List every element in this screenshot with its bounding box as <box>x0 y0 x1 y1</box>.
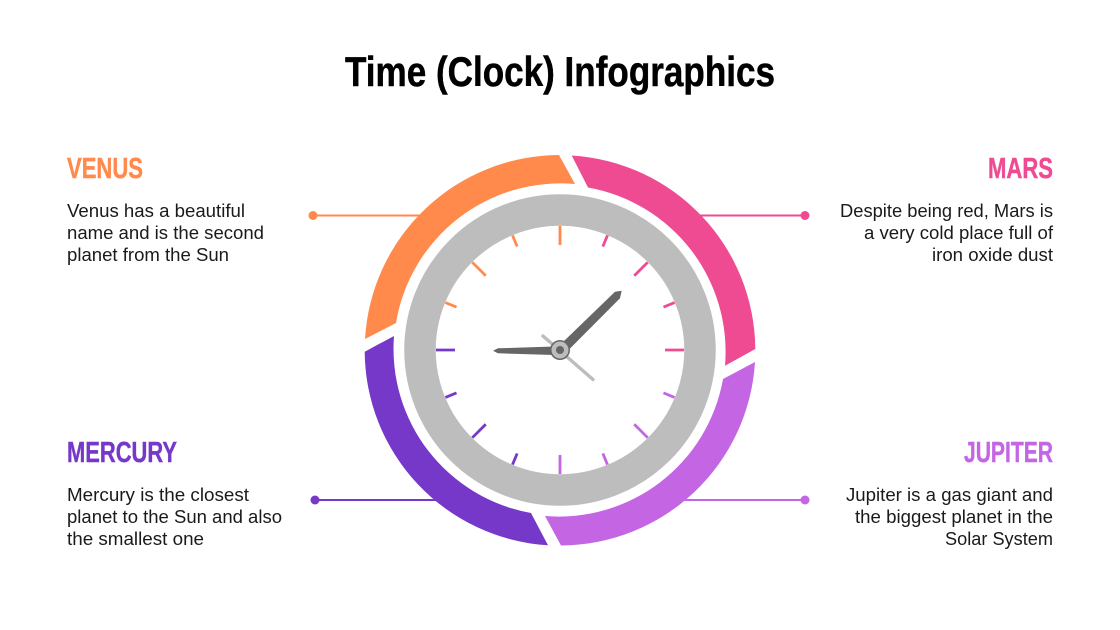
panel: jupiter <box>675 437 1053 549</box>
text: mercury description: Mercury is the closest <box>67 485 249 505</box>
panel: mars <box>695 153 1054 265</box>
panel: mercury <box>67 437 445 549</box>
hour hand <box>493 346 554 355</box>
text: jupiter description <box>846 485 1053 549</box>
connector: venus <box>308 211 425 220</box>
text: jupiter description: Solar System <box>945 529 1053 549</box>
segment: venus <box>365 155 575 339</box>
text: mars description: iron oxide dust <box>932 245 1053 265</box>
connector: jupiter <box>675 496 810 504</box>
text: mercury description <box>67 485 282 549</box>
text: jupiter description: Jupiter is a gas giant and <box>846 485 1053 505</box>
text: mercury description: the smallest one <box>67 529 204 549</box>
clock ticks <box>436 226 684 474</box>
text: venus description <box>67 201 264 265</box>
panel: venus <box>67 153 425 265</box>
text: venus description: planet from the Sun <box>67 245 229 265</box>
text: venus description: name and is the second <box>67 223 264 243</box>
minute hand <box>563 291 622 348</box>
heading: mars: MARS <box>988 153 1053 185</box>
text: mars description: Despite being red, Mars is <box>840 201 1053 221</box>
chart: clock <box>365 155 755 546</box>
title: Time (Clock) Infographics <box>345 48 775 95</box>
text: mars description <box>840 201 1054 265</box>
text: mercury description: planet to the Sun and also <box>67 507 282 527</box>
text: venus description: Venus has a beautiful <box>67 201 245 221</box>
segment: mars <box>572 156 755 366</box>
text: jupiter description: the biggest planet in the <box>855 507 1053 527</box>
connector: mars <box>695 211 810 220</box>
heading: venus: VENUS <box>67 153 143 185</box>
segment: jupiter <box>545 362 755 546</box>
clock face ring <box>420 210 700 490</box>
heading: jupiter: JUPITER <box>964 437 1053 469</box>
text: mars description: a very cold place full of <box>864 223 1054 243</box>
clock hub <box>550 340 570 360</box>
connector: mercury <box>310 496 445 504</box>
heading: mercury: MERCURY <box>67 437 177 469</box>
segment: mercury <box>365 336 548 545</box>
second hand <box>543 336 593 380</box>
